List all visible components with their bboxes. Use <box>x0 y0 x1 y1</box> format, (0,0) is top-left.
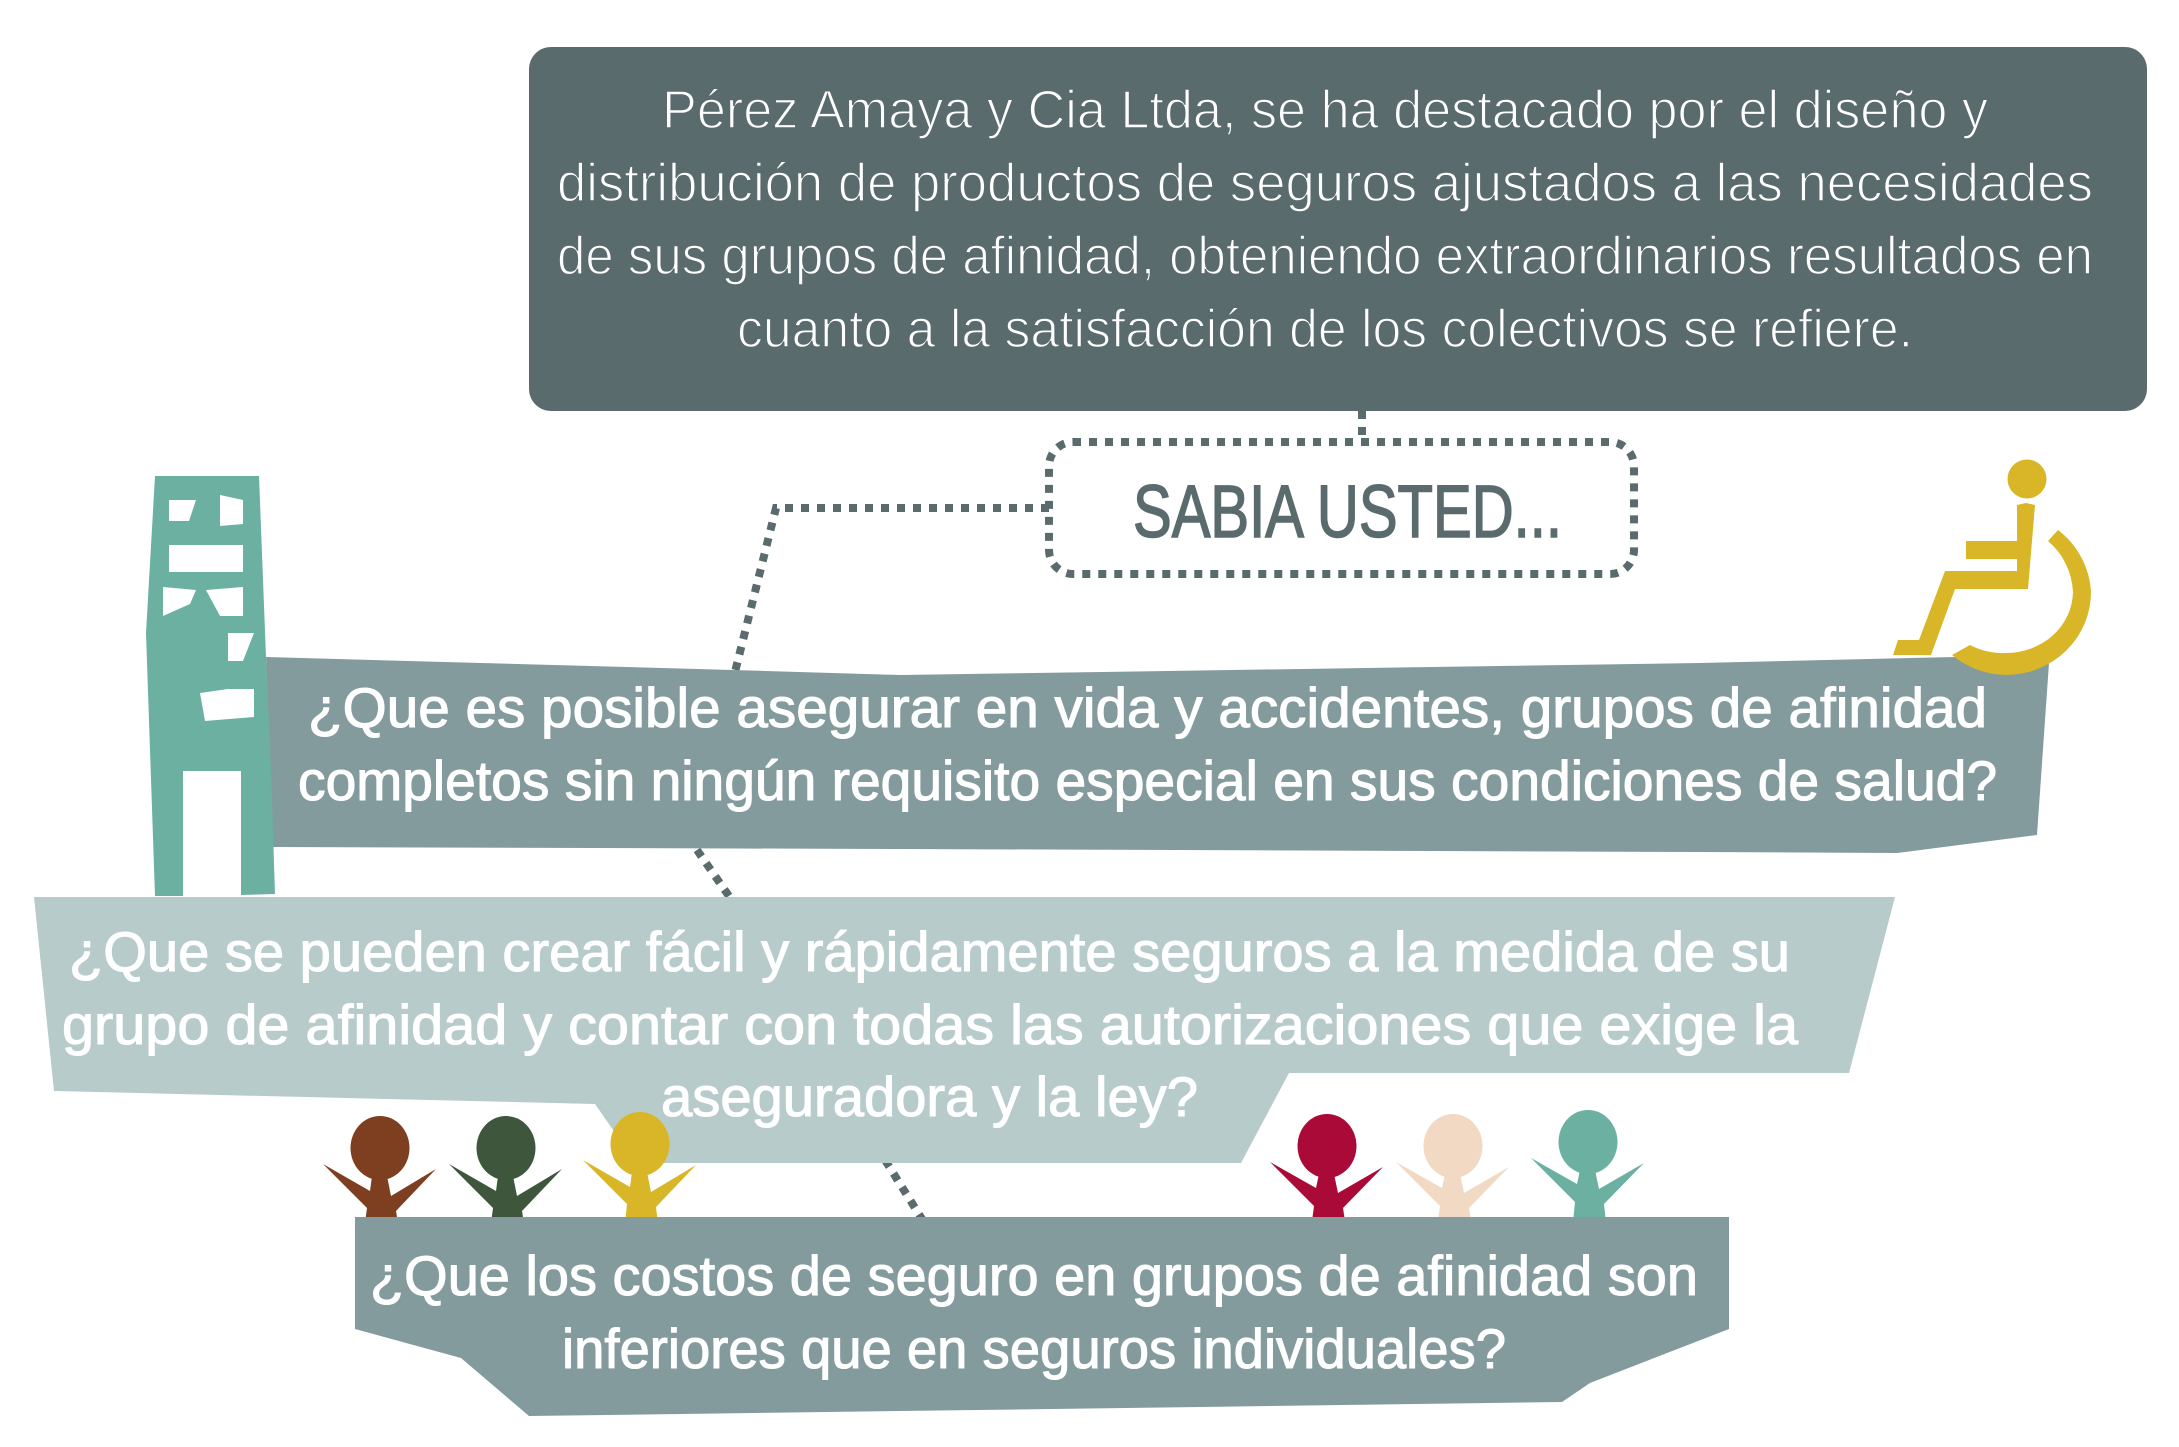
callout: sabia usted <box>1049 442 1634 574</box>
panel: question 2 <box>34 897 1895 1163</box>
icon: person yellow <box>583 1112 696 1224</box>
intro paragraph: cuanto a la satisfacción de los colectivos se refiere. <box>737 299 1913 359</box>
wheel <box>1952 530 2091 675</box>
seated body <box>1893 503 2035 655</box>
heading: SABIA USTED... <box>1133 470 1562 553</box>
dotted connectors <box>697 411 1362 1219</box>
question 3 text: inferiores que en seguros individuales? <box>562 1317 1506 1380</box>
intro box <box>529 47 2147 411</box>
panel: question 3 <box>355 1217 1729 1416</box>
head <box>2008 460 2046 498</box>
icon: wheelchair <box>1893 460 2091 675</box>
question 1 text <box>298 676 1997 812</box>
intro paragraph: Pérez Amaya y Cia Ltda, se ha destacado por el diseño y <box>662 80 1988 140</box>
icon: building <box>146 476 275 896</box>
icon: person peach <box>1396 1114 1509 1221</box>
question 1 banner <box>266 657 2049 853</box>
question 2 text <box>62 920 1799 1128</box>
question 1 text: ¿Que es posible asegurar en vida y accidentes, grupos de afinidad <box>308 676 1987 739</box>
question 2 text: grupo de afinidad y contar con todas las autorizaciones que exige la <box>62 993 1799 1056</box>
question 2 text: ¿Que se pueden crear fácil y rápidamente seguros a la medida de su <box>69 920 1790 983</box>
icon: person green <box>449 1116 562 1223</box>
question 1 text: completos sin ningún requisito especial en sus condiciones de salud? <box>298 749 1997 812</box>
icon: person teal <box>1531 1110 1644 1222</box>
intro paragraph <box>557 80 2093 359</box>
intro paragraph: distribución de productos de seguros ajustados a las necesidades <box>557 153 2093 213</box>
question 3 banner <box>355 1217 1729 1416</box>
question 2 text: aseguradora y la ley? <box>661 1065 1198 1128</box>
intro paragraph: de sus grupos de afinidad, obteniendo extraordinarios resultados en <box>557 226 2093 286</box>
panel: intro text <box>529 47 2147 411</box>
icon: person brown <box>323 1116 436 1223</box>
panel: question 1 <box>266 657 2049 853</box>
question 3 text <box>370 1244 1698 1380</box>
question 2 banner <box>34 897 1895 1163</box>
question 3 text: ¿Que los costos de seguro en grupos de afinidad son <box>370 1244 1698 1307</box>
icon: person crimson <box>1270 1114 1383 1221</box>
dotted frame <box>1049 442 1634 574</box>
